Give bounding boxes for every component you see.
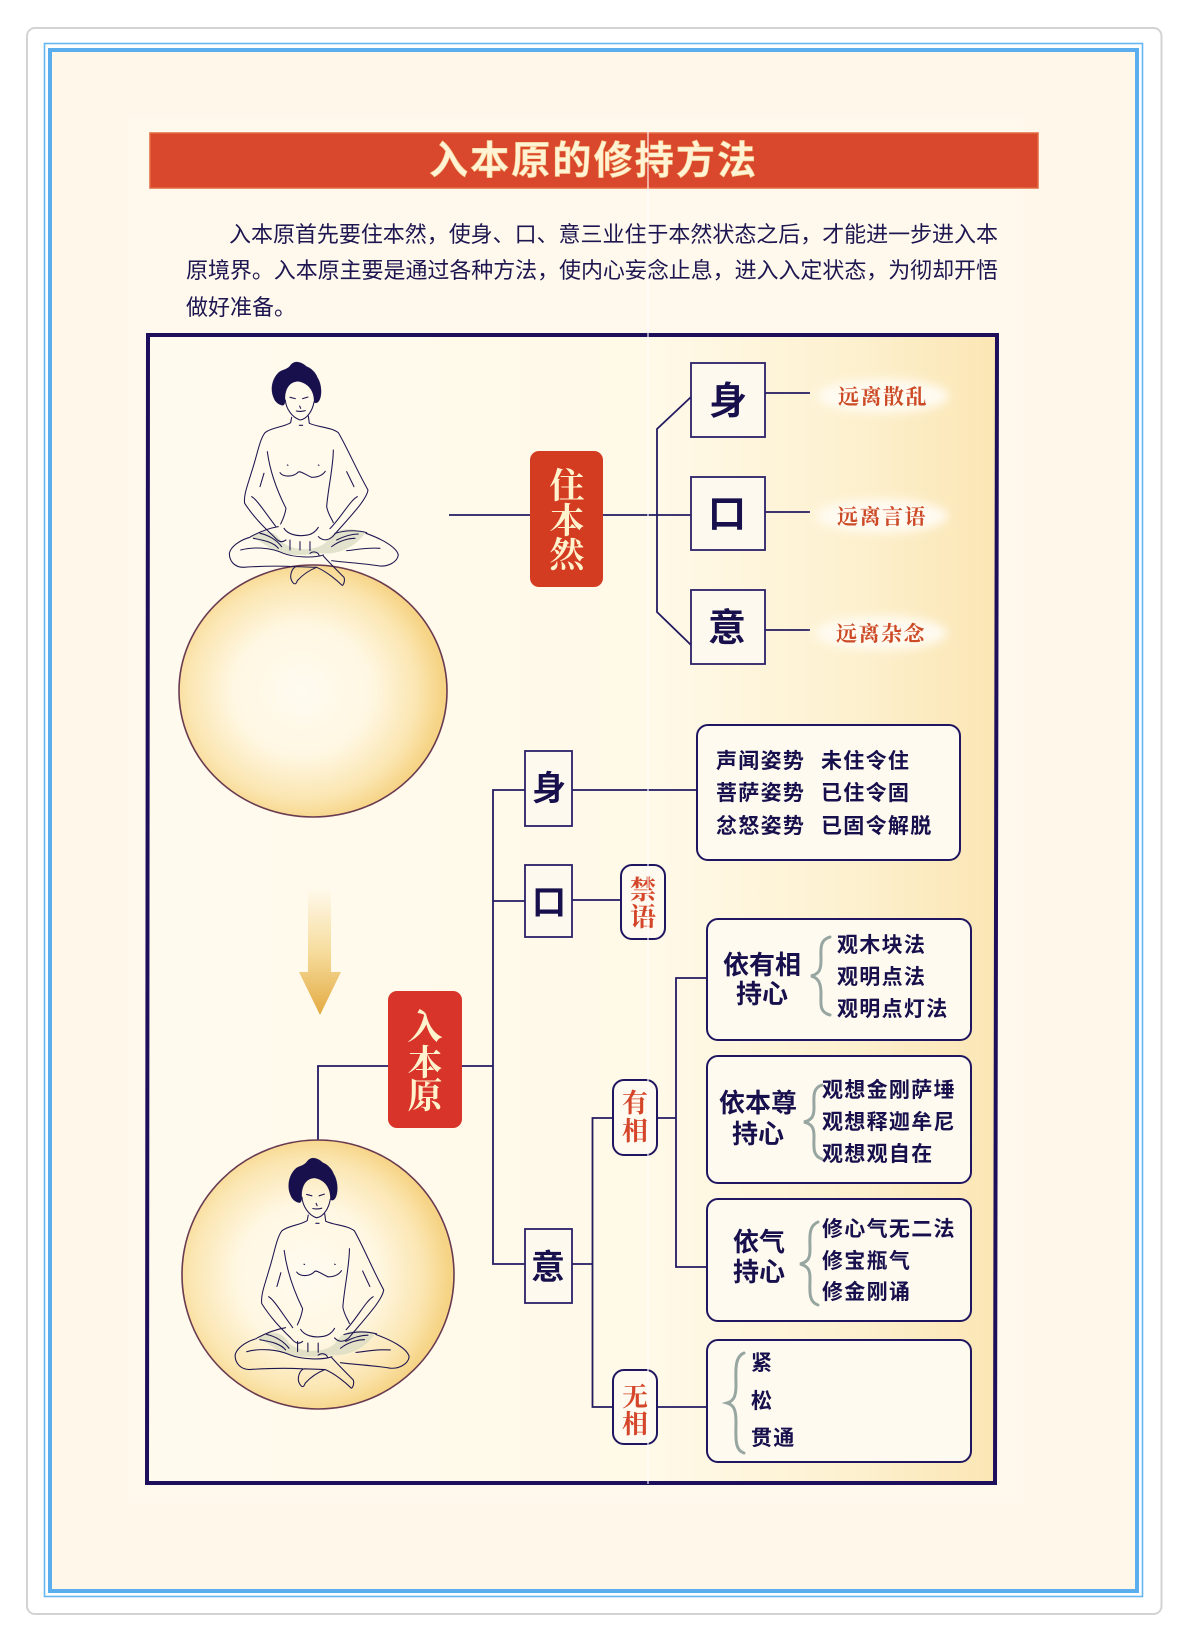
- panel: 依有相持心: 观明点法: [837, 966, 926, 989]
- box: 口 (lower): [525, 865, 572, 937]
- tag: 无相: 相: [622, 1410, 648, 1439]
- connector lines: bottom tree: [318, 790, 707, 1407]
- figure: meditator in sphere: [235, 1158, 409, 1388]
- box: 口 (lower): 口: [532, 884, 566, 922]
- panel: 紧松贯通: 贯通: [751, 1427, 796, 1450]
- label: 远离言语: 远离言语: [837, 505, 927, 529]
- label: 远离杂念: [815, 616, 947, 650]
- panel: 依气持心: [707, 1199, 971, 1321]
- label: 远离散乱: 远离散乱: [838, 385, 928, 409]
- panel: 紧松贯通: 松: [751, 1390, 773, 1413]
- box: 口: 口: [708, 494, 746, 536]
- tag: 禁语: [621, 865, 665, 939]
- label: 远离言语: [816, 499, 948, 533]
- tag: 禁语: 语: [630, 903, 656, 932]
- panel: 依本尊持心: 观想释迦牟尼: [822, 1111, 956, 1134]
- panel: 依有相持心: 持心: [736, 979, 788, 1009]
- panel: 依本尊持心: [707, 1056, 971, 1183]
- panel: postures: 声闻姿势: [716, 750, 805, 773]
- node: 住本然: 住: [549, 467, 585, 506]
- intro paragraph: 做好准备。: [186, 295, 296, 320]
- figure: meditator on sphere: [229, 362, 398, 585]
- panel: 依气持心: 修金刚诵: [822, 1280, 911, 1304]
- panel: 依有相持心: 观木块法: [837, 934, 926, 957]
- panel: 依有相持心: 观明点灯法: [837, 998, 948, 1021]
- intro paragraph: 入本原首先要住本然，使身、口、意三业住于本然状态之后，才能进一步进入本: [229, 222, 998, 247]
- box: 意: [691, 590, 765, 664]
- node: 入本原: 原: [407, 1077, 444, 1116]
- panel: 紧松贯通: 紧: [751, 1352, 773, 1375]
- panel: 依本尊持心: 持心: [732, 1119, 784, 1149]
- node: 入本原: 入: [407, 1008, 443, 1047]
- connector lines: top tree: [449, 393, 810, 645]
- panel: 依气持心: 修宝瓶气: [822, 1249, 911, 1273]
- box: 身 (lower): 身: [532, 770, 566, 808]
- panel: postures: 已固令解脱: [821, 814, 932, 838]
- box: 意: 意: [708, 608, 746, 650]
- arrow: downward: [299, 890, 341, 1015]
- panel: postures: 已住令固: [821, 781, 910, 805]
- label: 远离杂念: 远离杂念: [836, 622, 926, 646]
- panel: postures: 未住令住: [821, 749, 910, 773]
- box: 身: [691, 363, 765, 437]
- label: 远离散乱: [817, 379, 949, 413]
- panel: 依本尊持心: 观想观自在: [822, 1143, 934, 1166]
- title banner: 入本原的修持方法: [429, 140, 756, 183]
- panel: 依气持心: 依气: [733, 1227, 785, 1257]
- tag: 有相: 相: [622, 1117, 648, 1146]
- panel: 依本尊持心: 依本尊: [719, 1088, 797, 1118]
- panel: 依气持心: 持心: [733, 1257, 785, 1287]
- panel: postures: [697, 725, 960, 860]
- box: 意 (lower): 意: [531, 1249, 565, 1287]
- panel: 依本尊持心: 观想金刚萨埵: [822, 1078, 956, 1102]
- tag: 有相: [613, 1080, 657, 1155]
- panel: postures: 菩萨姿势: [716, 782, 805, 805]
- box: 身 (lower): [525, 751, 572, 826]
- intro paragraph: 原境界。入本原主要是通过各种方法，使内心妄念止息，进入入定状态，为彻却开悟: [186, 258, 998, 283]
- box: 身: 身: [709, 381, 747, 423]
- tag: 无相: [613, 1370, 657, 1444]
- node: 住本然: 然: [549, 536, 586, 575]
- box: 口: [691, 477, 765, 550]
- panel: 紧松贯通: [707, 1340, 971, 1462]
- node: 入本原: 本: [407, 1044, 443, 1083]
- tag: 有相: 有: [622, 1089, 648, 1118]
- page fold seam: [647, 130, 649, 1484]
- main diagram frame: [147, 335, 997, 1483]
- orb: lower sphere: [182, 1140, 454, 1409]
- panel: postures: 忿怒姿势: [716, 815, 805, 838]
- orb: upper sphere: [179, 565, 447, 817]
- panel: 依有相持心: 依有相: [723, 950, 801, 980]
- node: 入本原: [388, 991, 462, 1128]
- panel: 依气持心: 修心气无二法: [822, 1218, 956, 1241]
- title banner: [150, 133, 1038, 188]
- node: 住本然: 本: [549, 502, 585, 541]
- tag: 禁语: 禁: [630, 875, 657, 905]
- panel: 依有相持心: [707, 919, 971, 1040]
- node: 住本然: [530, 451, 603, 587]
- box: 意 (lower): [525, 1229, 572, 1303]
- lighter scan area: [127, 118, 1023, 1503]
- tag: 无相: 无: [622, 1383, 648, 1412]
- intro paragraph: [186, 222, 998, 320]
